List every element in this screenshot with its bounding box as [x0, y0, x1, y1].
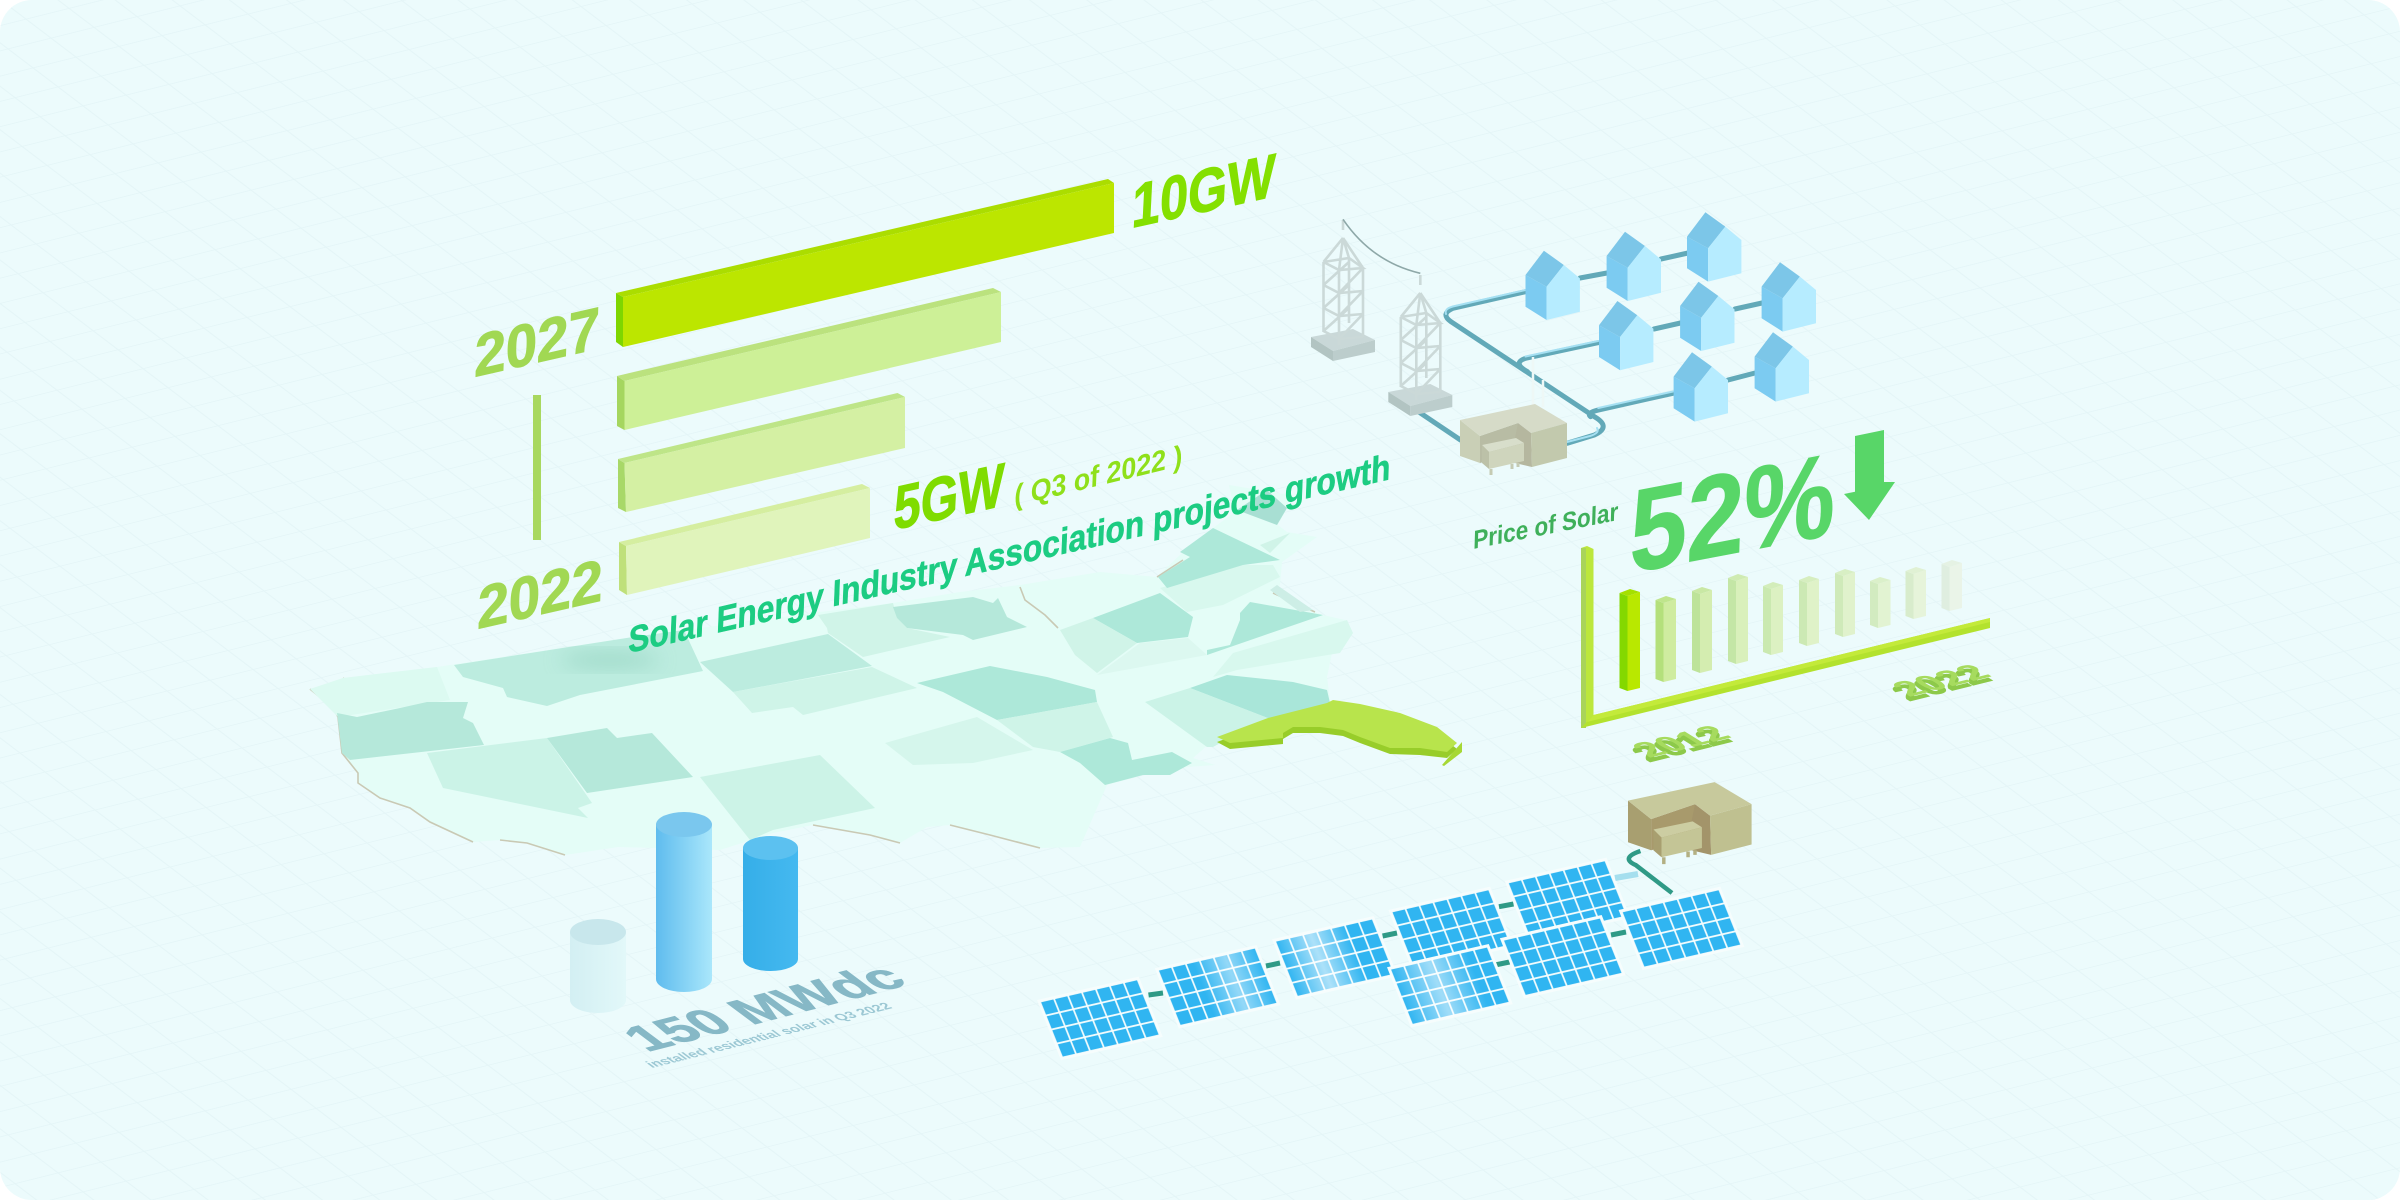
South Dakota — [733, 667, 917, 715]
panel: solar farm — [1037, 782, 1752, 1060]
Louisiana — [1060, 738, 1192, 785]
house — [1755, 332, 1809, 402]
pipe highlights — [1446, 290, 1673, 442]
antennas — [1533, 357, 1543, 407]
Nevada — [427, 738, 592, 818]
substation building — [1460, 404, 1567, 475]
bar 2020 — [1906, 567, 1926, 619]
bar 2019 — [1870, 577, 1890, 628]
Alabama — [1145, 688, 1273, 747]
bar 2014 — [1692, 587, 1712, 673]
solar panel 5 — [1505, 858, 1630, 941]
axis label 2012: 2012 — [1622, 720, 1739, 762]
Arkansas — [997, 702, 1113, 752]
Kentucky — [1097, 638, 1207, 675]
timeline line — [533, 395, 541, 540]
Iowa band — [917, 666, 1097, 720]
cylinder small — [570, 919, 626, 1013]
value 150 MWdc: 150 MWdc — [610, 957, 919, 1059]
New York — [1158, 528, 1280, 588]
solar panel 8 — [1387, 944, 1513, 1028]
house — [1607, 232, 1661, 301]
solar panel 2 — [1155, 945, 1281, 1028]
Montana — [454, 630, 703, 706]
green feed pipe — [1629, 851, 1672, 893]
substation building 2 — [1628, 782, 1752, 864]
bar 3 — [618, 393, 905, 512]
bar 2 — [617, 288, 1001, 430]
cylinder medium — [743, 836, 798, 971]
solar panel 6 — [1619, 887, 1744, 970]
note Q3 of 2022: ( Q3 of 2022 ) — [1014, 439, 1183, 513]
panel: price of solar chart — [1473, 428, 1999, 766]
axis label 2012: 2012 — [1622, 724, 1739, 766]
soft text shadow on map — [560, 653, 660, 667]
cylinder tall — [656, 812, 712, 992]
axis label 2012 — [1622, 720, 1739, 766]
Georgia — [1190, 675, 1330, 720]
solar panel 7 — [1500, 915, 1626, 998]
Washington — [310, 667, 450, 717]
tower 2 — [1388, 275, 1452, 416]
bar 2015 — [1728, 574, 1748, 664]
bar 2027 — [616, 179, 1114, 347]
tower 1 — [1311, 220, 1375, 361]
bar 2017 — [1799, 576, 1819, 646]
house — [1526, 251, 1580, 320]
axis label 2022: 2022 — [1882, 663, 1999, 705]
Indiana — [1060, 618, 1137, 673]
panel: transmission grid — [1311, 212, 1816, 475]
Oregon — [337, 702, 484, 760]
solar panel 1 — [1037, 977, 1163, 1060]
bar 2012 — [1620, 589, 1640, 691]
Utah — [547, 728, 693, 793]
caption installed residential solar: installed residential solar in Q3 2022 — [643, 1001, 896, 1070]
value 10GW: 10GW — [1130, 141, 1277, 242]
power line — [1343, 219, 1420, 273]
North Dakota — [700, 634, 872, 692]
Minnesota — [818, 603, 950, 657]
label 2027: 2027 — [474, 294, 601, 390]
Florida highlighted state — [1217, 700, 1462, 766]
axis label 2022 — [1882, 659, 1999, 705]
solar panel 4 — [1388, 887, 1514, 970]
light connector — [1615, 874, 1638, 878]
caption SEIA: Solar Energy Industry Association projects growth — [628, 446, 1391, 661]
panel: residential solar cylinders — [570, 812, 919, 1070]
value 52%: 52% — [1628, 428, 1837, 599]
arrow down — [1844, 430, 1895, 520]
Pennsylvania — [1160, 565, 1280, 612]
US map — [310, 485, 1462, 855]
Maine — [1237, 490, 1287, 525]
Massachusetts — [1260, 533, 1290, 553]
solar panel 3 — [1272, 916, 1398, 1000]
label 2022: 2022 — [477, 546, 604, 642]
bar 2016 — [1763, 582, 1783, 655]
house — [1674, 352, 1728, 422]
house — [1687, 212, 1741, 282]
panel: solar growth bars — [474, 141, 1391, 661]
label Price of Solar: Price of Solar — [1473, 496, 1619, 555]
North Carolina — [1213, 620, 1353, 677]
house — [1599, 301, 1653, 370]
connectors — [1148, 904, 1626, 995]
coastline edges — [310, 560, 1315, 855]
house — [1762, 262, 1816, 332]
map base — [310, 485, 1353, 855]
horizontal axis — [1581, 618, 1990, 728]
Oklahoma — [885, 717, 1033, 765]
Virginia — [1207, 602, 1323, 655]
bar 2018 — [1835, 569, 1855, 637]
vertical axis — [1581, 546, 1594, 728]
Maryland — [1270, 585, 1313, 612]
New Mexico — [700, 755, 875, 840]
axis label 2022: 2022 — [1882, 659, 1999, 701]
Ohio — [1093, 593, 1193, 643]
bar 2013 — [1656, 596, 1676, 682]
value 5GW: 5GW — [892, 450, 1006, 544]
pipes — [1418, 253, 1762, 443]
bar 2022 — [619, 484, 870, 595]
bar 2022 — [1942, 560, 1962, 611]
house — [1680, 282, 1734, 351]
Wisconsin — [893, 597, 1027, 640]
